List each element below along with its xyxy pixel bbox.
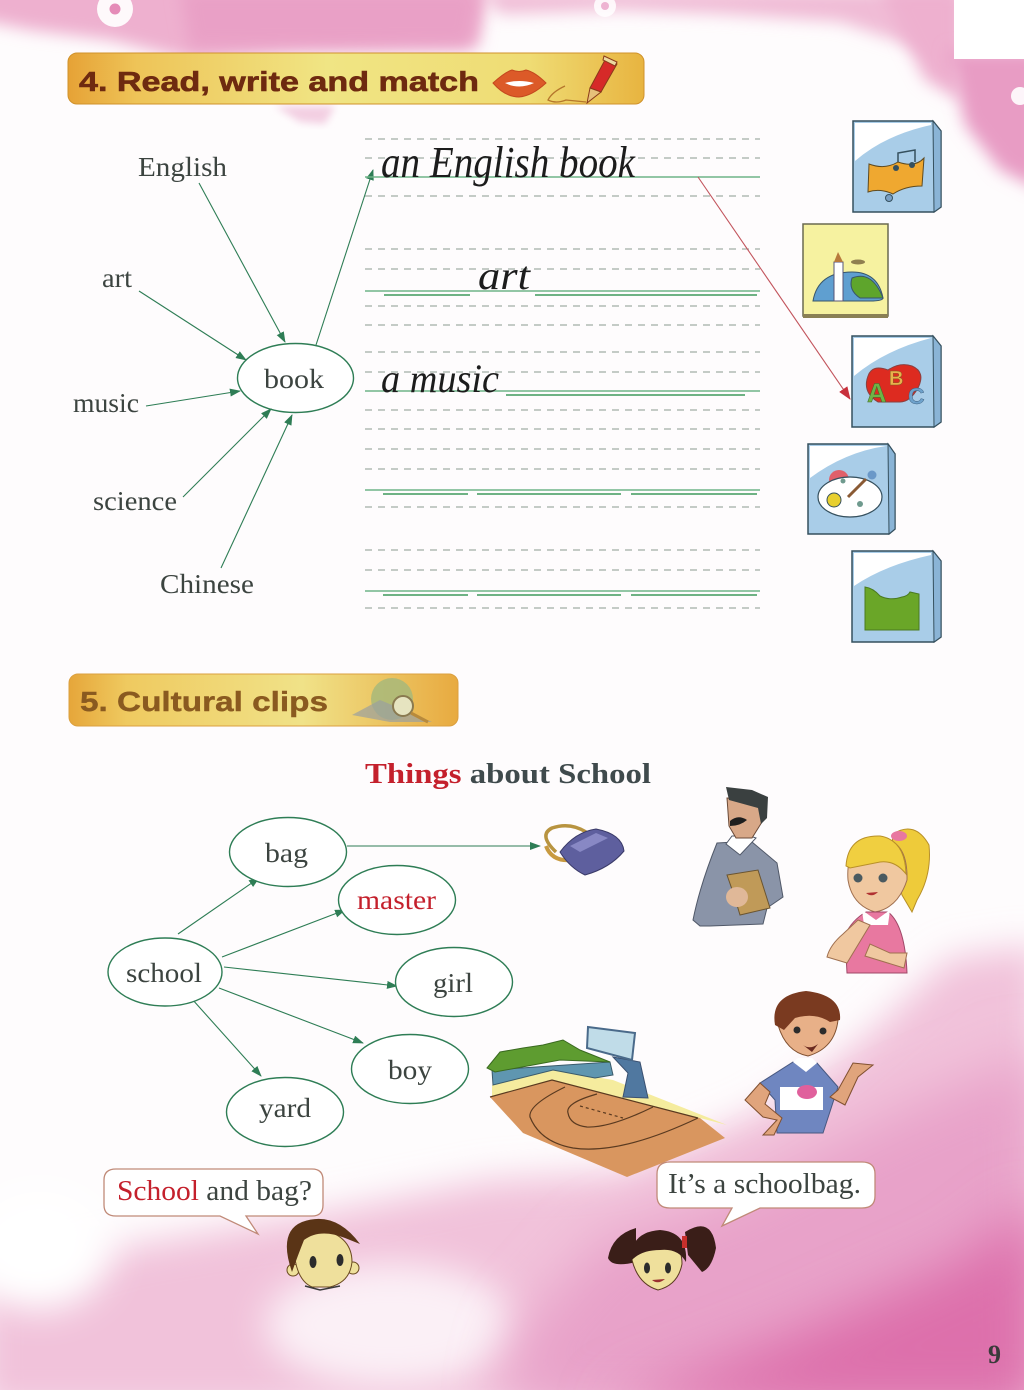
icon: ABC book: A — [867, 378, 886, 408]
icon: art palette book — [808, 444, 895, 534]
oval: bag — [230, 818, 346, 886]
speech bubble: School and bag?: School and bag? — [117, 1176, 312, 1207]
speech bubble: It's a schoolbag.: It’s a schoolbag. — [668, 1169, 861, 1200]
oval: school — [108, 938, 222, 1006]
arrows to book — [139, 170, 373, 568]
basketball stand — [613, 1057, 648, 1098]
school arrows — [178, 846, 540, 1076]
match arrow: red — [698, 177, 850, 399]
icon: science rocket and earth — [803, 224, 888, 318]
oval: bag: bag — [265, 838, 308, 868]
oval: boy — [352, 1034, 468, 1104]
subheading: Things about School: Things about School — [365, 759, 651, 790]
words around book: art — [102, 263, 133, 293]
words around book — [73, 152, 254, 599]
heading text: Read, write and match: 4. Read, write and match — [79, 66, 479, 97]
diagram: book word web — [73, 152, 373, 599]
handwritten answers: an English book — [381, 138, 636, 187]
icon: globe and magnifier — [352, 678, 432, 722]
oval: school: school — [126, 958, 202, 988]
oval: girl — [396, 948, 512, 1016]
handwritten answers: art — [478, 253, 531, 298]
book oval — [238, 344, 354, 412]
speech bubble: School and bag? — [104, 1169, 323, 1234]
banner: section 5 heading — [69, 674, 458, 726]
banner: section 4 heading — [68, 53, 644, 104]
words around book: music — [73, 388, 139, 418]
words around book: English — [138, 152, 228, 182]
icon: ABC book: C — [908, 383, 925, 409]
oval: yard — [226, 1078, 344, 1146]
icon: ABC book: B — [889, 368, 903, 390]
icon: pencil — [548, 56, 617, 103]
page number: 9 — [988, 1340, 1001, 1369]
diagram: school word web — [108, 818, 540, 1146]
writing lines — [365, 139, 760, 608]
book oval: book — [264, 364, 325, 394]
oval: girl: girl — [433, 968, 473, 998]
court lines — [490, 1080, 698, 1149]
figure: girl head — [608, 1226, 716, 1290]
figure: girl — [827, 829, 930, 973]
icon: schoolbag — [546, 826, 624, 875]
words around book: Chinese — [160, 569, 254, 599]
oval: master: master — [357, 885, 436, 915]
hedge wall — [492, 1062, 613, 1085]
speech bubble: It's a schoolbag. — [657, 1162, 875, 1226]
figure: boy — [745, 991, 873, 1135]
heading text: Cultural clips: 5. Cultural clips — [80, 686, 328, 717]
handwritten answers — [381, 138, 636, 401]
figure: master — [693, 787, 783, 926]
words around book: science — [93, 486, 177, 516]
icon: Chinese book — [852, 551, 941, 642]
icon: ABC book — [852, 336, 941, 427]
figure: boy head — [287, 1219, 360, 1290]
handwritten answers: a music — [381, 356, 499, 401]
court ground — [490, 1080, 725, 1177]
illustration: basketball court — [487, 1027, 727, 1177]
oval: master — [338, 866, 456, 934]
icon: lips — [493, 70, 546, 97]
oval: yard: yard — [259, 1093, 312, 1123]
oval: boy: boy — [388, 1055, 433, 1085]
icon: music book — [853, 121, 941, 212]
yellow strip — [492, 1070, 727, 1125]
